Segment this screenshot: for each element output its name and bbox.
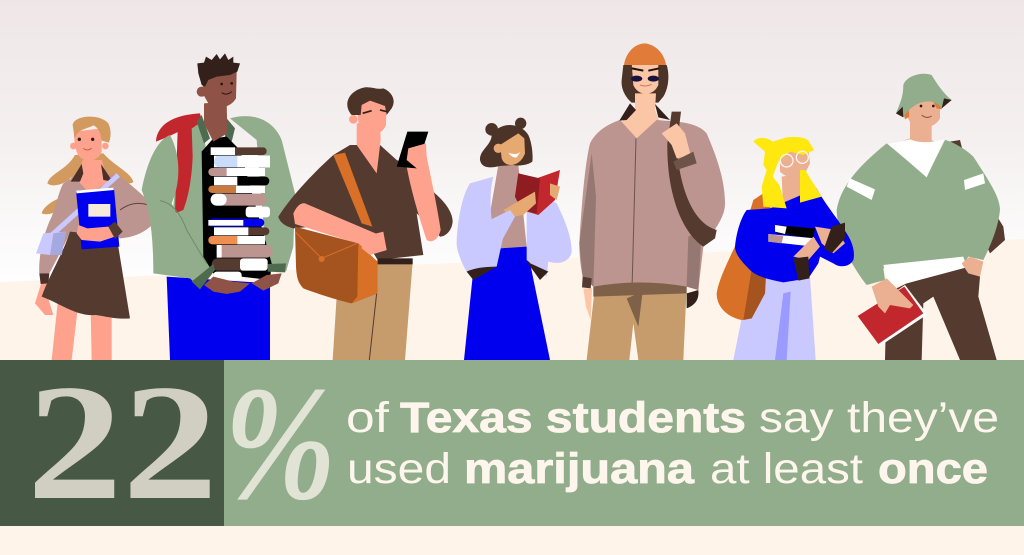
- book stack: [208, 147, 273, 280]
- figure: student with phone and satchel: [278, 87, 453, 360]
- banner: dark green: [0, 360, 224, 526]
- headline text: of: [346, 394, 390, 442]
- headline text: [346, 394, 999, 493]
- headline text: at least: [710, 445, 863, 493]
- figure: student with stack of books: [142, 53, 295, 360]
- ground: [0, 239, 1024, 555]
- headline text: marijuana: [464, 445, 695, 493]
- figure: girl with blue notebook: [35, 117, 158, 360]
- figure: tall student in beanie: [579, 43, 725, 360]
- headline text: Texas students: [400, 394, 746, 442]
- banner: light green: [224, 360, 1024, 526]
- headline text: once: [878, 445, 988, 493]
- figure: blonde girl with glasses and orange bag: [717, 137, 854, 360]
- statistic: 22 percent: [27, 350, 336, 534]
- headline text: used: [347, 445, 451, 493]
- figure: student in bucket hat with red book: [837, 74, 1005, 360]
- background sky: [0, 0, 1024, 290]
- statistic: 22 percent: 22: [27, 350, 218, 534]
- statistic: 22 percent: %: [224, 354, 336, 534]
- headline text: say they’ve: [759, 394, 999, 442]
- figure: girl reading a red book: [457, 118, 572, 360]
